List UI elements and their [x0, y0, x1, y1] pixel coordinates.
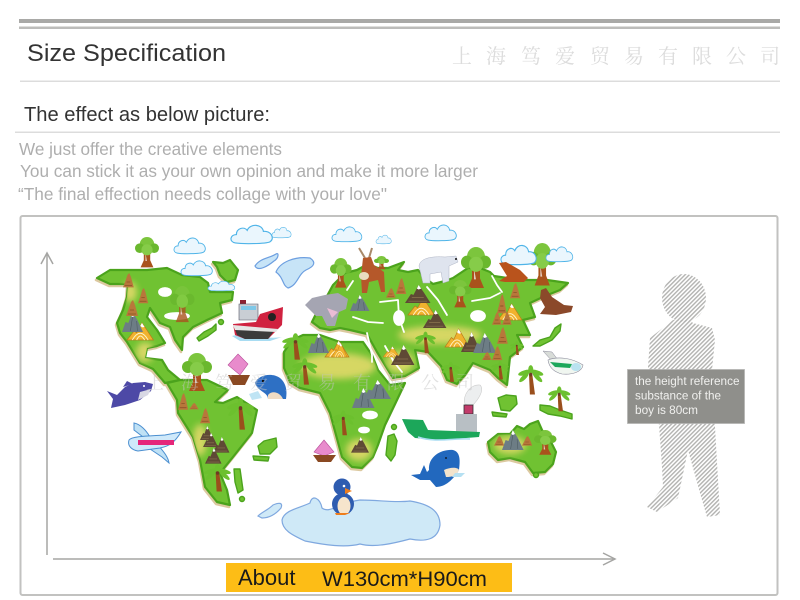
grey mountains: [122, 295, 524, 450]
land: greenland: [213, 260, 238, 282]
intro text: “The final effection needs collage with your love": [18, 184, 387, 204]
small islands: [197, 320, 572, 502]
desert patches: [123, 282, 526, 461]
brown bear: [499, 262, 528, 282]
world map illustration: [96, 225, 583, 546]
height reference label: [628, 370, 744, 424]
red ship: [232, 300, 283, 341]
height reference label: boy is 80cm: [635, 405, 698, 417]
pink sailboat: [228, 354, 250, 385]
vertical height arrow: [41, 253, 53, 555]
pink sailboat south: [313, 440, 336, 462]
height reference label: substance of the: [635, 390, 721, 402]
boy head: [662, 274, 706, 322]
orange mountains: [127, 298, 522, 357]
walrus: [540, 288, 573, 315]
boy height silhouette: [647, 274, 720, 517]
map watermark: 上海笃爱贸易有限公司: [146, 373, 474, 393]
green airplane: [543, 351, 583, 374]
subheading: The effect as below picture:: [24, 104, 270, 126]
land: africa: [284, 335, 405, 468]
polar bear: [419, 256, 458, 283]
blue arctic lakes: [255, 254, 314, 288]
white cloud over arctic: [208, 281, 235, 291]
ice sea: antarctica: [258, 498, 440, 546]
shark: [107, 381, 153, 408]
intro text: You can stick it as your own opinion and make it more larger: [20, 161, 478, 181]
picture frame: [20, 216, 778, 595]
clouds: [174, 225, 456, 254]
land shadows: [96, 262, 567, 507]
deer: [359, 248, 385, 293]
cloud over north america: [181, 261, 212, 276]
company watermark: 上海笃爱贸易有限公司: [452, 45, 780, 68]
grey wolf: [305, 293, 348, 326]
blue airplane: [129, 423, 181, 463]
tan peaks: [123, 273, 532, 446]
size bar: About: [238, 565, 296, 590]
brown mountains: [200, 285, 480, 464]
intro text: [18, 139, 478, 204]
land: eurasia: [312, 262, 568, 385]
penguin: [332, 478, 354, 515]
continents: [97, 260, 568, 505]
trees: [135, 237, 556, 455]
title: Size Specification: [27, 40, 226, 67]
land: south america: [167, 380, 257, 505]
land: australia: [488, 421, 556, 473]
header rules: [19, 19, 780, 29]
horizontal width arrow: [53, 553, 615, 565]
boy body: [647, 320, 720, 517]
land: north america: [97, 268, 233, 383]
inland seas and lakes: [159, 276, 502, 432]
size bar: W130cm*H90cm: [322, 568, 487, 591]
green ship: [402, 385, 482, 440]
size bar: [226, 563, 512, 592]
dolphin: [249, 375, 286, 400]
whale: [411, 450, 465, 487]
height reference label: the height reference: [635, 376, 740, 388]
intro text: We just offer the creative elements: [19, 139, 282, 159]
clouds over far east: [501, 245, 573, 265]
palm trees: [204, 332, 571, 492]
